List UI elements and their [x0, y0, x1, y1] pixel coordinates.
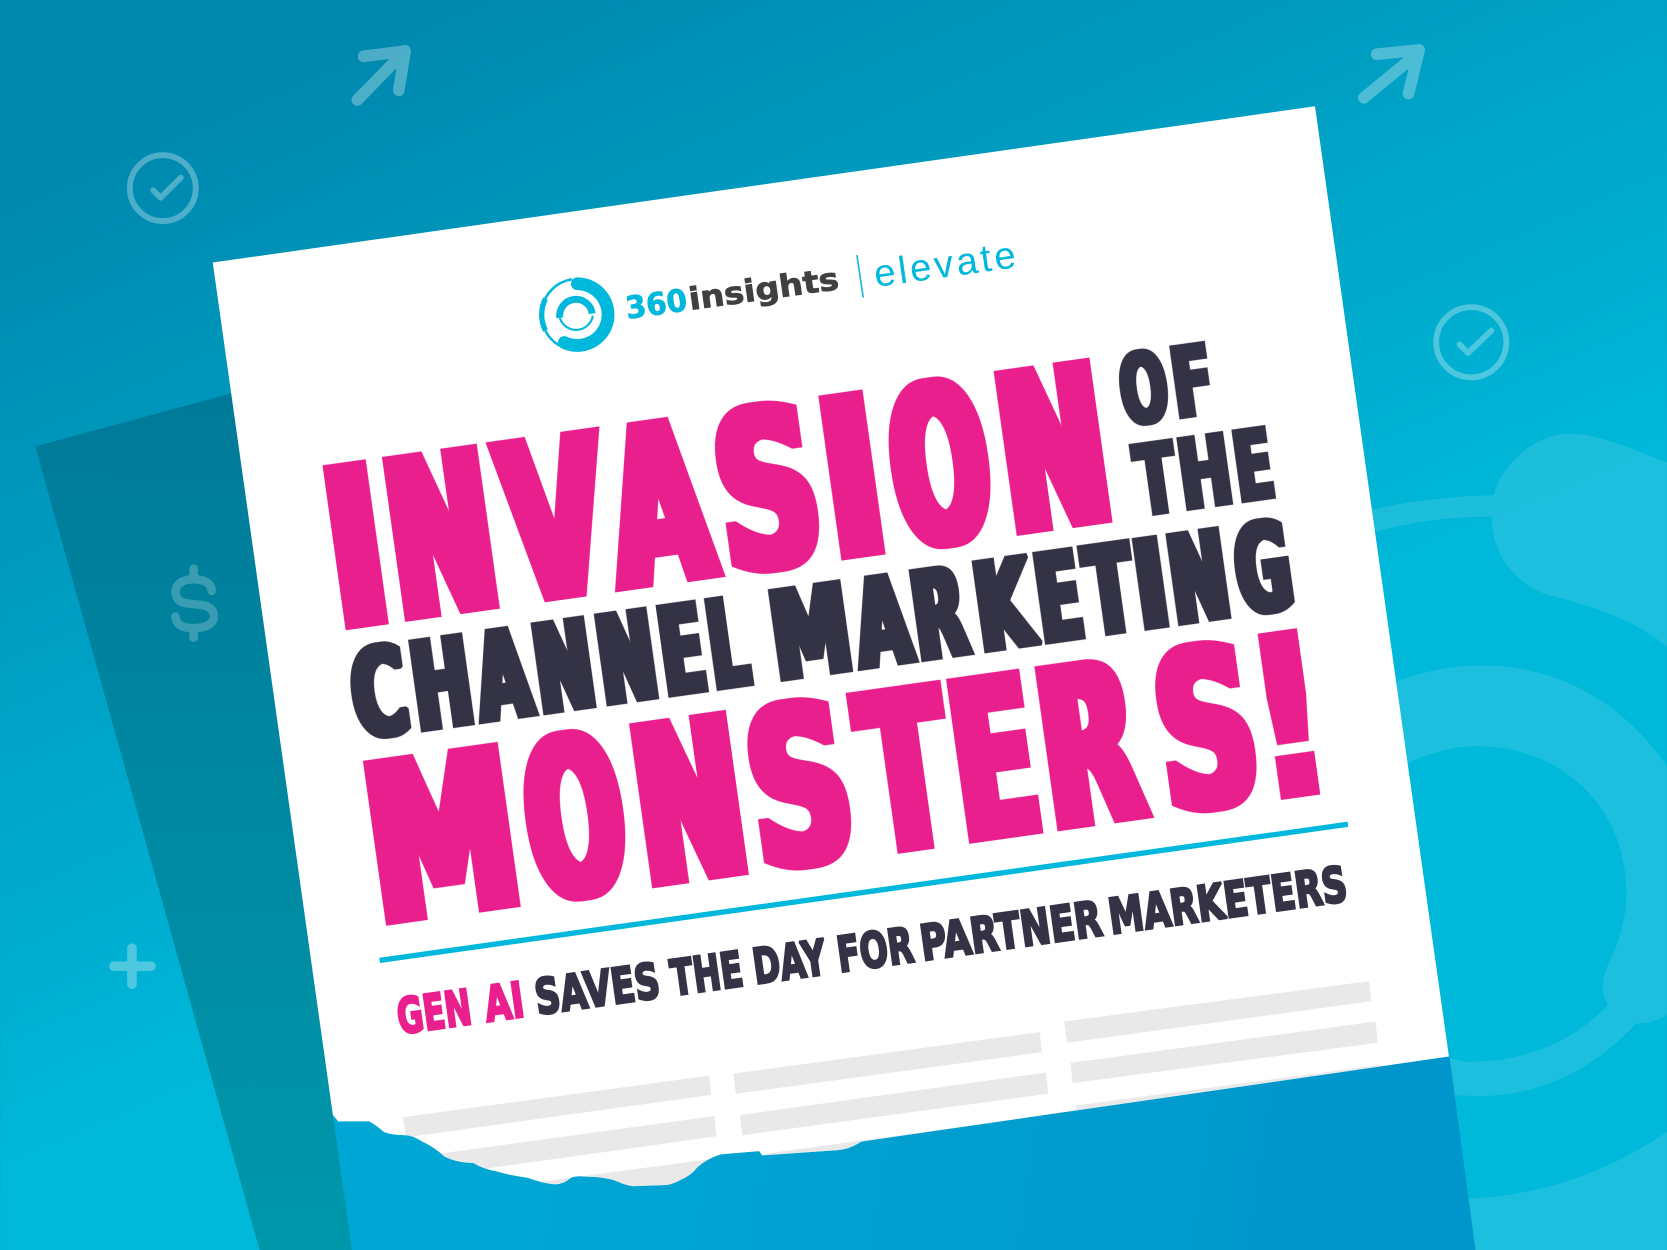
- icon: arrow right: [1364, 50, 1419, 98]
- title: CHANNEL MARKETING: M: [762, 558, 859, 708]
- logo wordmark: 360: [623, 283, 689, 327]
- title: CHANNEL MARKETING: I: [1126, 513, 1176, 657]
- title: INVASION: S: [702, 360, 834, 624]
- subtitle: saves the day for partner marketers: THE: [667, 941, 747, 1007]
- title: THE: H: [1172, 414, 1239, 532]
- paper sheet: [213, 106, 1449, 1222]
- title: CHANNEL MARKETING: A: [467, 603, 539, 750]
- subtitle: GEN AI: GEN: [393, 979, 475, 1046]
- title: MONSTERS!: !: [1238, 585, 1341, 852]
- subtitle: saves the day for partner marketers: FOR: [833, 917, 917, 984]
- title: MONSTERS!: T: [847, 643, 964, 904]
- title: THE: E: [1227, 408, 1280, 524]
- title: CHANNEL MARKETING: N: [1161, 505, 1237, 652]
- icon: dollar sign: [176, 569, 214, 638]
- title: CHANNEL MARKETING: T: [1078, 518, 1142, 664]
- title: OF: O: [1113, 330, 1175, 448]
- title: MONSTERS!: S: [734, 657, 866, 920]
- logo wordmark: insights: [687, 261, 841, 318]
- title: MONSTERS!: S: [1142, 600, 1271, 863]
- title: CHANNEL MARKETING: G: [1227, 496, 1300, 643]
- title: CHANNEL MARKETING: E: [1028, 525, 1090, 671]
- title: OF: F: [1165, 324, 1220, 441]
- blue under sheet: [333, 1052, 1476, 1250]
- icon: check circle left: [130, 155, 196, 221]
- logo divider: [857, 255, 863, 298]
- title: THE: T: [1129, 422, 1183, 538]
- title: MONSTERS!: E: [937, 631, 1051, 892]
- title: CHANNEL MARKETING: K: [967, 532, 1043, 680]
- icon: plus sign: [114, 948, 151, 984]
- title: INVASION: N: [984, 320, 1123, 584]
- logo icon: [541, 280, 608, 345]
- title: CHANNEL MARKETING: L: [700, 572, 756, 717]
- subtitle: saves the day for partner marketers: PARTNER: [917, 890, 1105, 972]
- watermark: upper arc and blob right: [1361, 434, 1667, 646]
- title: CHANNEL MARKETING: C: [343, 620, 416, 767]
- subtitle: saves the day for partner marketers: SAVES: [531, 953, 663, 1026]
- logo: elevate: elevate: [871, 233, 1018, 296]
- title: MONSTERS!: O: [510, 689, 640, 952]
- title: INVASION: V: [488, 390, 621, 654]
- title: CHANNEL MARKETING: N: [589, 585, 665, 733]
- icon: arrow left: [357, 51, 405, 100]
- title: MONSTERS!: R: [1025, 616, 1155, 879]
- title: INVASION: I: [807, 351, 898, 609]
- title: CHANNEL MARKETING: E: [651, 578, 713, 724]
- subtitle: GEN AI: AI: [481, 972, 528, 1034]
- title: CHANNEL MARKETING: N: [526, 594, 602, 742]
- title: MONSTERS!: M: [352, 704, 533, 974]
- watermark: lower corner sweep: [1462, 1132, 1667, 1250]
- title: INVASION: O: [876, 336, 1005, 599]
- title: CHANNEL MARKETING: A: [846, 550, 919, 697]
- title: INVASION: A: [594, 376, 725, 639]
- placeholder article text bars: [403, 981, 1380, 1186]
- title: INVASION: N: [373, 406, 510, 670]
- icon: check circle right: [1436, 307, 1506, 377]
- cyan rule: [380, 824, 1348, 960]
- watermark: large ring right: [1382, 665, 1667, 1096]
- title: CHANNEL MARKETING: R: [904, 542, 975, 689]
- dark back sheet: [35, 393, 352, 1250]
- subtitle: saves the day for partner marketers: DAY: [749, 929, 830, 996]
- title: CHANNEL MARKETING: H: [403, 611, 481, 759]
- subtitle: saves the day for partner marketers: MARKETERS: [1105, 856, 1351, 946]
- title: INVASION: I: [312, 421, 401, 678]
- title: MONSTERS!: N: [620, 672, 760, 936]
